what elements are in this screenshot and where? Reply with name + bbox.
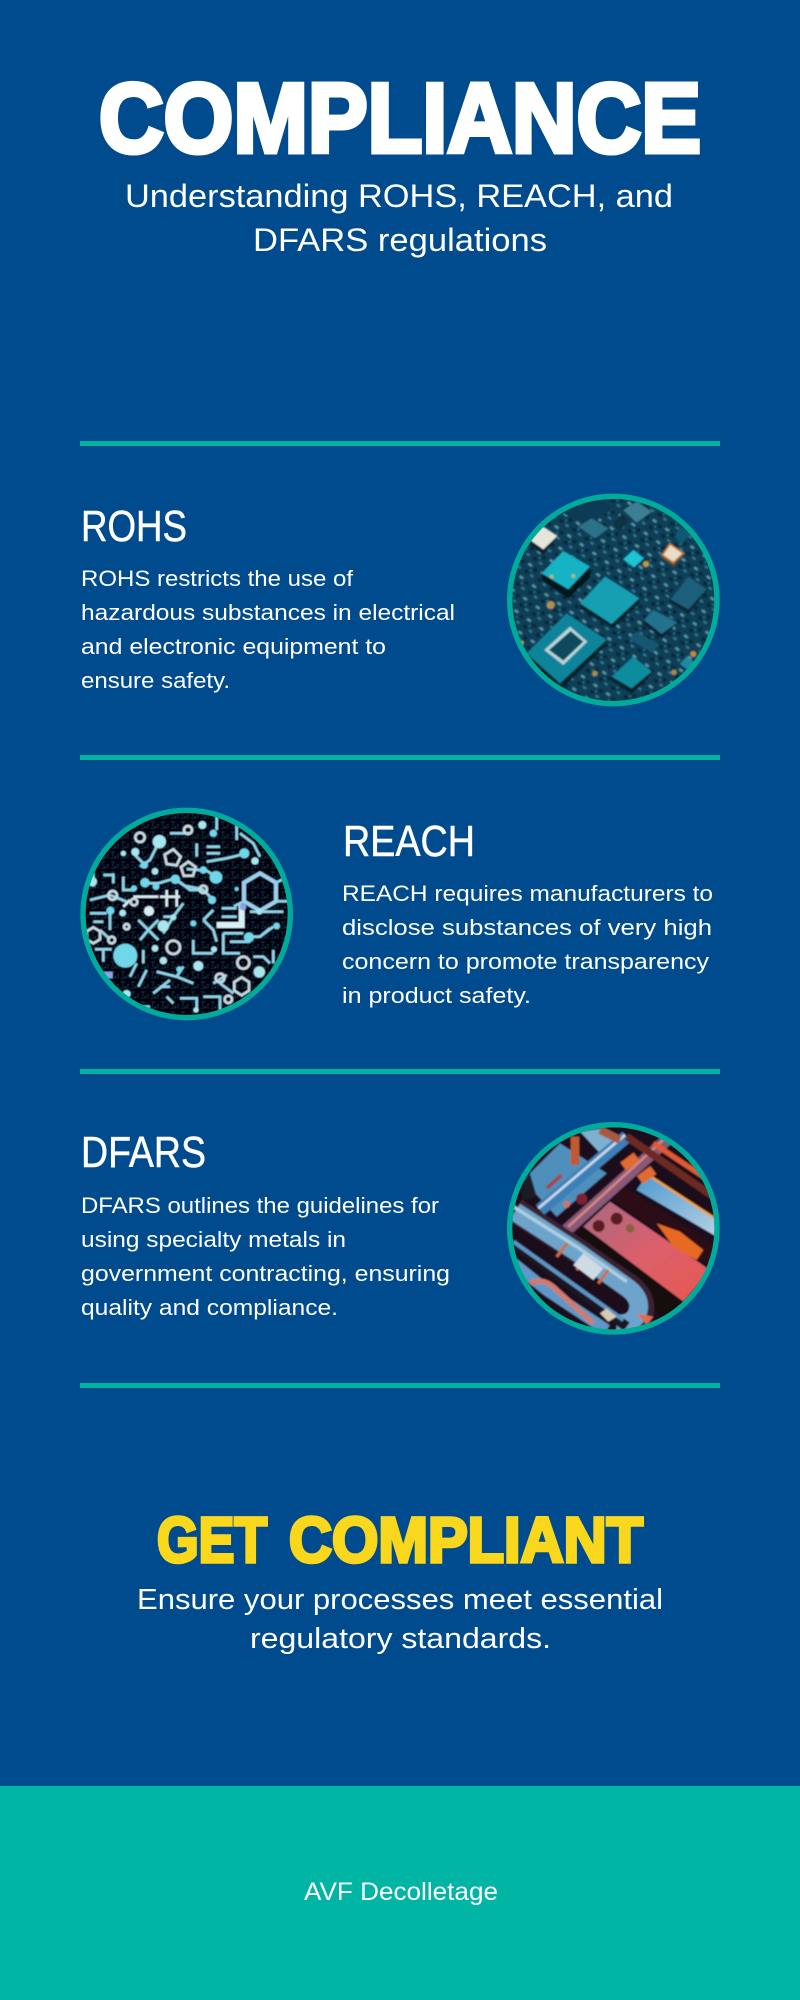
text block: DFARS description: DFARS outlines the guidelines for: [81, 1193, 439, 1218]
icon: metal pipes photo: [510, 1125, 717, 1332]
footer: [0, 1786, 800, 2000]
text block: DFARS description: using specialty metals in: [81, 1227, 346, 1252]
icon: molecules pattern photo: [83, 810, 290, 1018]
text block: call to action copy: regulatory standards.: [250, 1623, 551, 1655]
text block: ROHS description: hazardous substances in electrical: [81, 600, 455, 625]
text block: DFARS description: quality and compliance.: [81, 1295, 338, 1320]
text block: ROHS description: ROHS restricts the use of: [81, 566, 354, 591]
panel: ROHS: [81, 496, 717, 704]
text block: REACH description: concern to promote transparency: [342, 949, 709, 974]
subtitle: DFARS regulations: [253, 222, 547, 258]
text block: DFARS description: government contracting, ensuring: [81, 1261, 450, 1286]
heading: REACH: REACH: [343, 817, 475, 866]
text block: REACH description: disclose substances of very high: [342, 915, 712, 940]
text block: REACH description: in product safety.: [342, 983, 531, 1008]
text block: DFARS description: [81, 1193, 450, 1320]
text block: ROHS description: [81, 566, 455, 693]
heading: ROHS: ROHS: [81, 502, 187, 551]
subtitle: Understanding ROHS, REACH, and: [125, 178, 673, 214]
heading: DFARS: DFARS: [81, 1128, 206, 1177]
text block: call to action copy: [137, 1584, 663, 1655]
icon: circuit board photo: [510, 496, 717, 704]
text block: REACH description: REACH requires manufacturers to: [342, 881, 713, 906]
panel: REACH: [83, 810, 713, 1018]
footer text: AVF Decolletage: [304, 1878, 498, 1906]
text block: call to action copy: Ensure your processes meet essential: [137, 1584, 663, 1616]
text block: REACH description: [342, 881, 713, 1008]
text block: ROHS description: ensure safety.: [81, 668, 230, 693]
call to action: [137, 1504, 663, 1655]
heading: get compliant: COMPLIANT: [289, 1504, 643, 1576]
text block: ROHS description: and electronic equipment to: [81, 634, 386, 659]
panel: DFARS: [81, 1125, 717, 1332]
subtitle: [125, 178, 673, 258]
heading: get compliant: GET: [157, 1504, 267, 1576]
title: COMPLIANCE: [99, 63, 701, 173]
header: [99, 63, 701, 258]
